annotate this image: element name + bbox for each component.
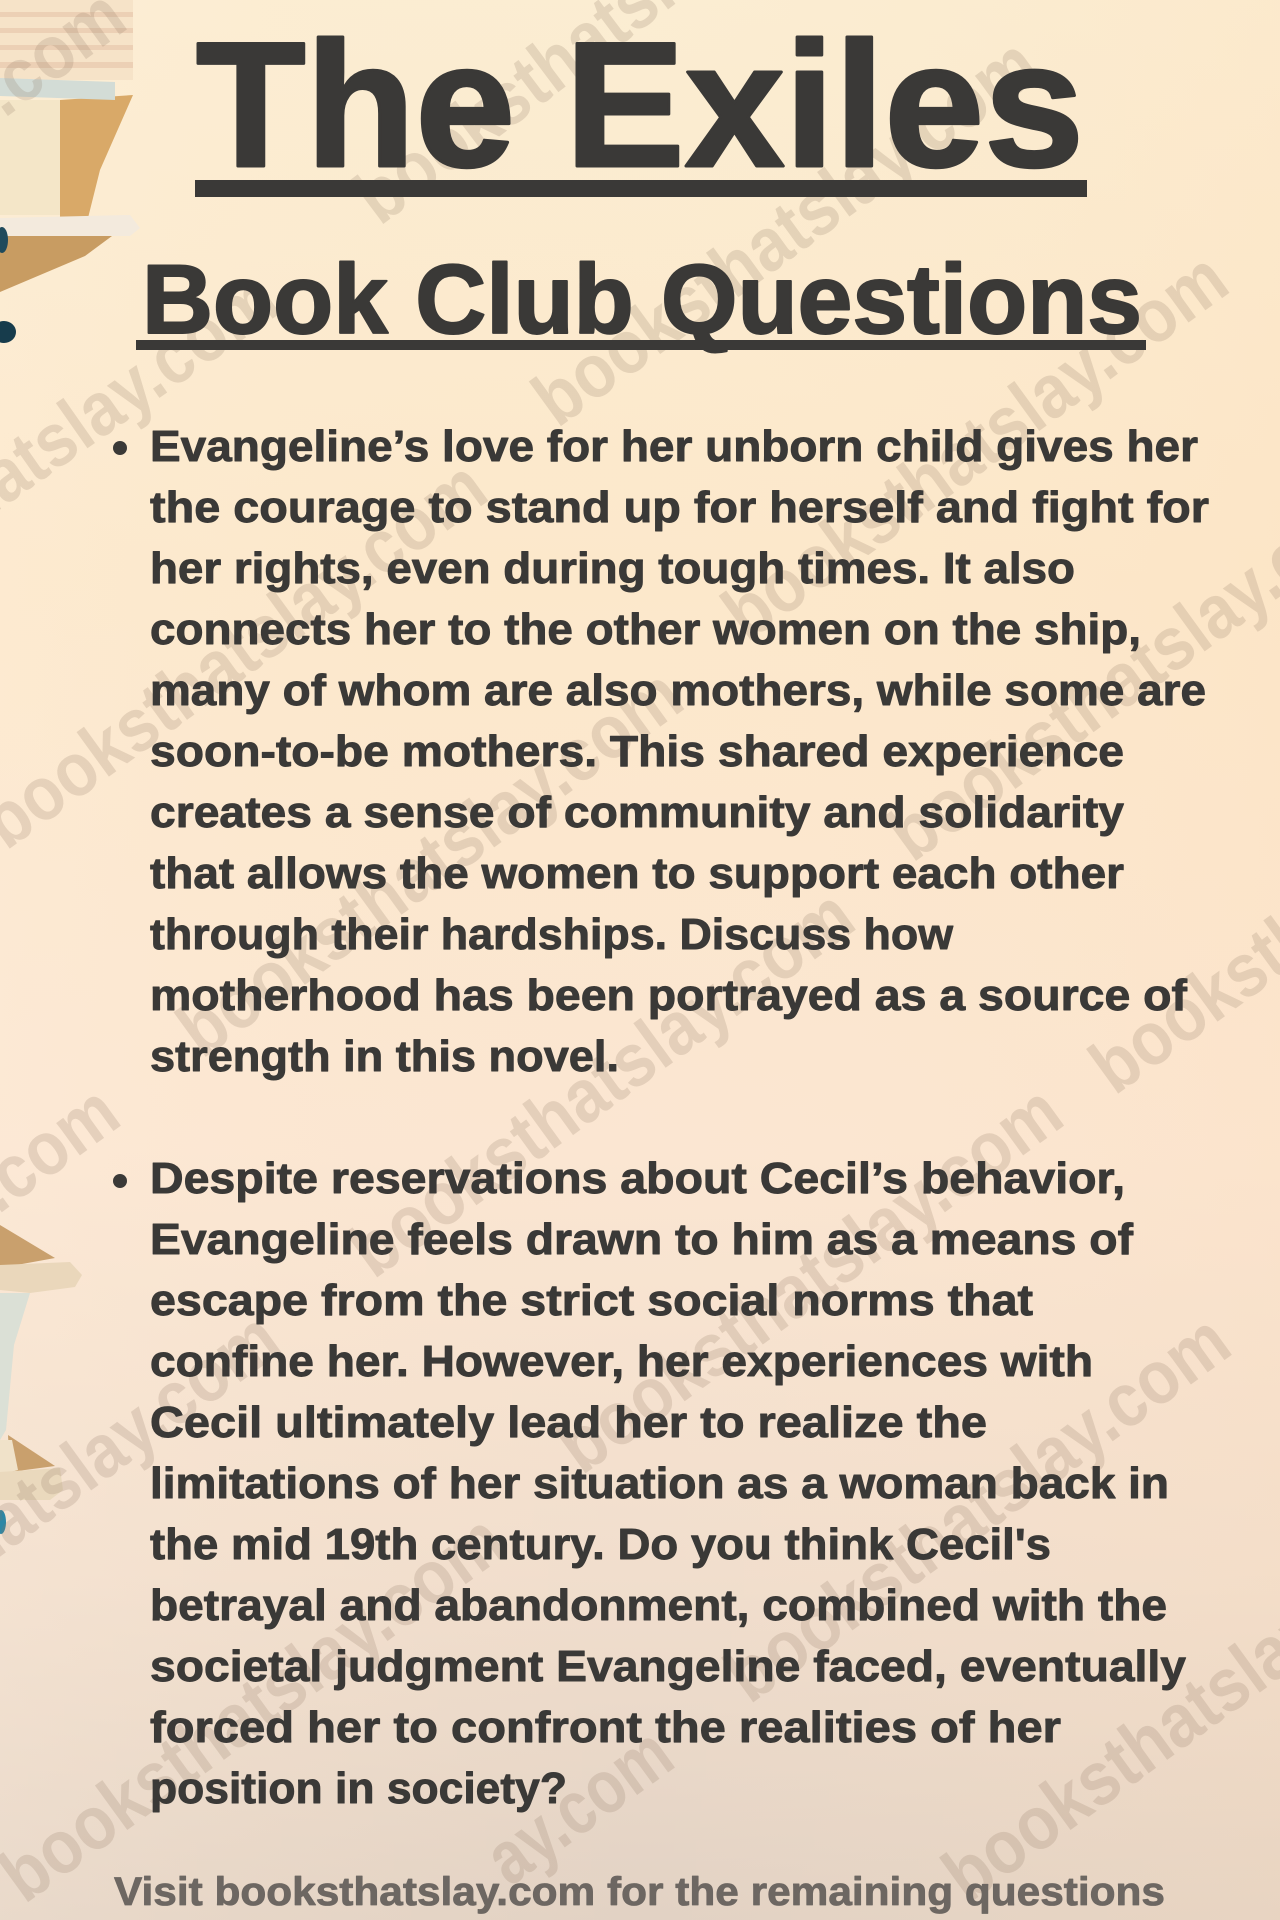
question 1: strength in this novel.	[150, 1032, 619, 1081]
question 1: through their hardships. Discuss how	[150, 910, 954, 959]
question 2: limitations of her situation as a woman back in	[150, 1459, 1169, 1508]
heading: Book Club Questions: Book Club Questions	[142, 244, 1142, 354]
question 1: creates a sense of community and solidarity	[150, 788, 1125, 837]
question 2: forced her to confront the realities of her	[150, 1703, 1061, 1752]
book stack: lower left	[0, 1225, 82, 1534]
watermarks: ay.com	[470, 1710, 688, 1901]
question 2: confine her. However, her experiences with	[150, 1337, 1093, 1386]
question 1	[113, 422, 1209, 1081]
question 2: escape from the strict social norms that	[150, 1276, 1033, 1325]
question 1: soon-to-be mothers. This shared experience	[150, 727, 1124, 776]
question 2: Evangeline feels drawn to him as a means of	[150, 1215, 1133, 1264]
question 1: Evangeline’s love for her unborn child gives her	[150, 422, 1198, 471]
question 2	[113, 1154, 1187, 1813]
title: The Exiles: The Exiles	[196, 5, 1084, 204]
watermarks: booksthatslay.com	[334, 872, 869, 1294]
footer call to action: Visit booksthatslay.com for the remaining questions	[114, 1870, 1165, 1914]
watermarks: booksthatslay.com	[542, 1068, 1077, 1490]
question 1: connects her to the other women on the ship,	[150, 605, 1141, 654]
watermarks: booksthatslay.com	[0, 1497, 520, 1918]
question 1: many of whom are also mothers, while some are	[150, 666, 1206, 715]
question 2: societal judgment Evangeline faced, eventually	[150, 1642, 1187, 1691]
question 2: the mid 19th century. Do you think Cecil's	[150, 1520, 1051, 1569]
question 2: position in society?	[150, 1764, 567, 1813]
question 1: motherhood has been portrayed as a source of	[150, 971, 1187, 1020]
question 2: Despite reservations about Cecil’s behavior,	[150, 1154, 1125, 1203]
book stack: top left	[0, 0, 140, 343]
question 2: betrayal and abandonment, combined with the	[150, 1581, 1167, 1630]
question 1: the courage to stand up for herself and fight for	[150, 483, 1209, 532]
watermarks: booksthatslay.com	[162, 652, 698, 1073]
question 2: Cecil ultimately lead her to realize the	[150, 1398, 987, 1447]
question 1: that allows the women to support each other	[150, 849, 1124, 898]
question 1: her rights, even during tough times. It also	[150, 544, 1075, 593]
